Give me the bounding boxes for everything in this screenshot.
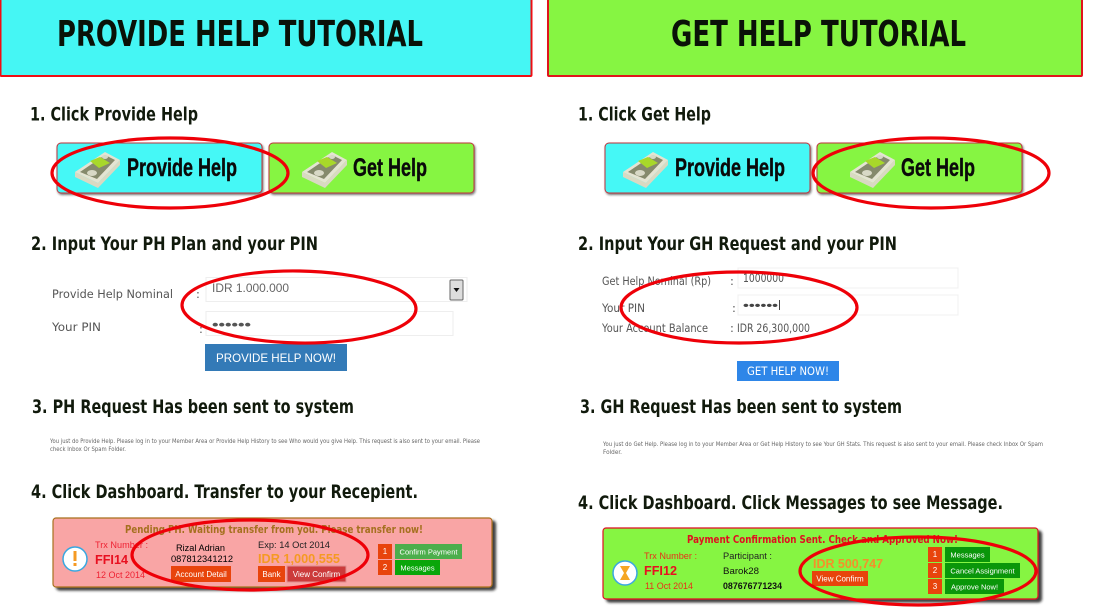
step 3 heading right: 3. GH Request Has been sent to system [580, 396, 902, 418]
form: get help: Your PIN [601, 301, 645, 315]
button: get help [817, 143, 1022, 193]
icon: hourglass [613, 561, 637, 585]
step 1 buttons left [57, 143, 474, 193]
transaction card: payment confirmation: Barok28 [723, 566, 759, 577]
step 2 heading right: 2. Input Your GH Request and your PIN [578, 233, 897, 255]
form: provide help [51, 278, 467, 371]
step 4 heading left: 4. Click Dashboard. Transfer to your Recepient. [31, 481, 418, 503]
panel: provide help header [0, 0, 532, 76]
transaction card: pending PH: Account Detail [175, 570, 227, 579]
form: get help: 1000000 [743, 271, 784, 285]
highlight ellipse: recipient and amount [132, 520, 368, 590]
form: get help: : [730, 321, 734, 335]
form: provide help: PROVIDE HELP NOW! [216, 351, 336, 365]
form: get help [601, 268, 958, 381]
button: get help: Get Help [353, 154, 427, 182]
highlight ellipse: GH request and PIN [621, 272, 857, 343]
form: get help: Your Account Balance [601, 321, 708, 335]
transaction card: payment confirmation: 1 [933, 550, 938, 559]
form: provide help: IDR 1.000.000 [212, 281, 289, 295]
transaction card: pending PH: Pending PH. Waiting transfer from you. Please transfer now! [125, 524, 423, 536]
highlight ellipse: amount and message buttons [800, 537, 1036, 605]
step 1 heading left: 1. Click Provide Help [30, 104, 198, 126]
transaction card: payment confirmation: 2 [933, 566, 938, 575]
transaction card: pending PH: IDR 1,000,555 [258, 552, 340, 566]
highlight ellipse: PH plan and PIN [181, 269, 417, 345]
transaction card: payment confirmation: Messages [950, 550, 985, 560]
transaction card: pending PH [53, 518, 492, 587]
transaction card: pending PH: Trx Number : [95, 540, 148, 551]
transaction card: pending PH: Rizal Adrian [176, 543, 225, 553]
button: provide help [57, 143, 262, 193]
transaction card: payment confirmation: Approve Now! [951, 582, 998, 592]
transaction card: payment confirmation: Trx Number : [644, 551, 697, 562]
transaction card: payment confirmation [603, 528, 1038, 599]
icon: money stack [75, 152, 120, 188]
button: get help [269, 143, 474, 193]
step 1 heading right: 1. Click Get Help [578, 104, 711, 126]
message text right: You just do Get Help. Please log in to your Member Area or Get Help History to see Your GH Stats. This request is also sent to your email. Please check Inbox Or Spam [602, 442, 1043, 448]
form: provide help: •••••• [212, 317, 252, 332]
transaction card: payment confirmation: Participant : [723, 551, 772, 562]
transaction card: pending PH: View Confirm [293, 570, 341, 579]
button: provide help [605, 143, 810, 193]
message text left: You just do Provide Help. Please log in to your Member Area or Provide Help History to see Who would you give Help. This request is also sent to your email. Please [49, 439, 480, 445]
message text right [602, 442, 1043, 456]
icon: money stack [850, 152, 895, 188]
button: provide help: Provide Help [127, 154, 237, 182]
transaction card: pending PH: Exp: 14 Oct 2014 [258, 540, 330, 551]
transaction card: pending PH: 12 Oct 2014 [96, 570, 145, 581]
heading: get help tutorial: GET HELP TUTORIAL [671, 14, 966, 55]
form: provide help: : [199, 322, 203, 336]
transaction card: payment confirmation: FFI12 [644, 564, 677, 578]
transaction card: payment confirmation: Cancel Assignment [950, 566, 1016, 576]
button: get help: Get Help [901, 154, 975, 182]
form: get help: •••••• [743, 300, 778, 312]
transaction card: pending PH: Confirm Payment [400, 548, 458, 556]
step 3 heading left: 3. PH Request Has been sent to system [32, 396, 354, 418]
highlight ellipse: provide help [52, 138, 288, 208]
transaction card: pending PH: Bank [262, 570, 282, 579]
form: get help: Get Help Nominal (Rp) [602, 274, 711, 288]
transaction card: payment confirmation: View Confirm [816, 574, 864, 584]
form: get help: IDR 26,300,000 [737, 321, 810, 335]
icon: money stack [302, 152, 347, 188]
transaction card: pending PH: 2 [383, 563, 388, 572]
message text left: check Inbox Or Spam Folder. [50, 447, 126, 453]
step 2 heading left: 2. Input Your PH Plan and your PIN [31, 233, 318, 255]
transaction card: payment confirmation: 087676771234 [723, 581, 783, 592]
transaction card: pending PH: 087812341212 [171, 554, 233, 564]
form: provide help: : [196, 287, 200, 301]
form: get help: : [730, 274, 734, 288]
panel: get help header [548, 0, 1082, 76]
transaction card: pending PH: FFI14 [95, 553, 128, 567]
icon: money stack [623, 152, 668, 188]
form: get help: GET HELP NOW! [747, 364, 829, 378]
transaction card: payment confirmation: Payment Confirmation Sent. Check and Approved Now! [687, 534, 958, 546]
step 1 buttons right [605, 143, 1022, 193]
transaction card: pending PH: Messages [400, 564, 435, 572]
form: provide help: Provide Help Nominal [52, 287, 173, 301]
button: provide help: Provide Help [675, 154, 785, 182]
transaction card: payment confirmation: 3 [933, 582, 938, 591]
transaction card: payment confirmation: 11 Oct 2014 [645, 581, 693, 592]
message text left [49, 439, 480, 453]
message text right: Folder. [603, 450, 622, 456]
transaction card: pending PH: 1 [383, 547, 388, 556]
icon: warning [63, 547, 87, 571]
form: get help: : [732, 301, 736, 315]
heading: provide help tutorial: PROVIDE HELP TUTORIAL [57, 14, 423, 55]
form: provide help: Your PIN [51, 320, 101, 334]
highlight ellipse: get help [813, 138, 1049, 208]
transaction card: payment confirmation: IDR 500,747 [813, 557, 883, 571]
